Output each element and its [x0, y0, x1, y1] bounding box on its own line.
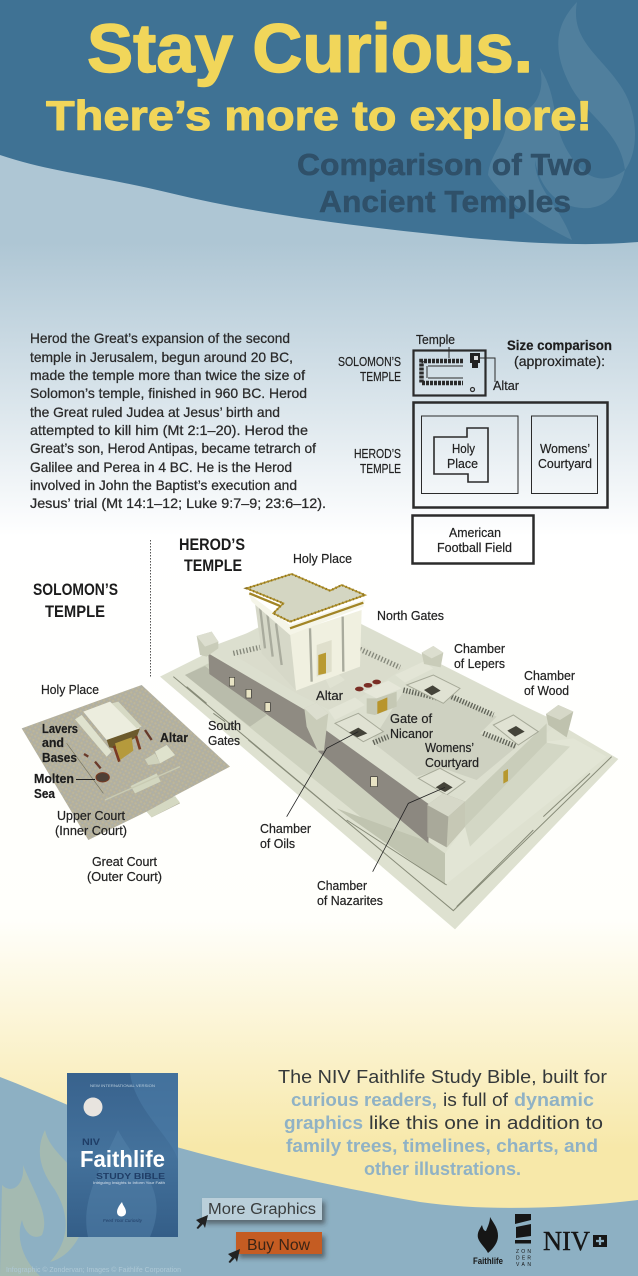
book cover: NIV Faithlife Study Bible: STUDY BIBLE — [96, 1172, 166, 1181]
text block: promotional copy: like this one in addition to — [369, 1113, 603, 1133]
labels: Solomon's temple: Great Court — [92, 855, 158, 869]
logo: NIV: NIV — [543, 1226, 590, 1256]
size comparison labels: TEMPLE — [360, 370, 401, 384]
text block: history paragraph: involved in John the Baptist’s execution and — [30, 478, 297, 493]
labels: Herod's temple: Altar — [316, 689, 343, 703]
Herod's temple plan box — [414, 402, 608, 508]
text block: promotional copy: family trees, timelines, charts, and — [286, 1136, 598, 1156]
labels: Herod's temple: of Wood — [524, 684, 569, 698]
book cover: NIV Faithlife Study Bible: Faithlife — [80, 1146, 165, 1172]
text block: promotional copy: dynamic — [514, 1090, 594, 1110]
front-left slope — [185, 663, 445, 885]
labels: Solomon's temple: (Outer Court) — [87, 870, 162, 884]
towers — [197, 632, 573, 847]
chart: size comparison diagram — [338, 333, 612, 564]
text block: promotional copy: The NIV Faithlife Study Bible, built for — [278, 1067, 607, 1087]
dark front wall face — [208, 653, 318, 751]
text block: history paragraph: Galilee and Perea in 4 BC. He is the Herod — [30, 460, 292, 475]
size comparison labels: American — [449, 526, 501, 540]
text block: history paragraph: temple in Jerusalem, begun around 20 BC, — [30, 350, 293, 365]
labels: Solomon's temple — [34, 683, 188, 884]
size comparison labels: Size comparison — [507, 338, 612, 353]
labels: Solomon's temple: Upper Court — [57, 809, 126, 823]
illustration: Herod's temple model — [160, 574, 618, 929]
labels: Solomon's temple: and — [42, 736, 64, 750]
labels: Herod's temple: Nicanor — [390, 727, 433, 741]
right front wall — [465, 723, 547, 827]
labels: Herod's temple: of Oils — [260, 837, 295, 851]
logo: Zondervan: ZON — [516, 1249, 531, 1255]
text block: history paragraph: made the temple more than twice the size of — [30, 368, 305, 383]
logo: Zondervan: VAN — [516, 1262, 531, 1268]
icon: cursor arrow for Buy Now — [228, 1249, 240, 1263]
chamber pointer lines — [287, 732, 445, 872]
labels: Herod's temple: Chamber — [524, 669, 575, 683]
temple building — [247, 574, 365, 691]
text block: history paragraph: attempted to kill him (Mt 2:1–20). Herod the — [30, 423, 308, 438]
labels: Herod's temple: North Gates — [377, 609, 444, 623]
corner chambers — [335, 675, 538, 795]
labels: Herod's temple: Chamber — [317, 879, 367, 893]
heading: Comparison of Two Ancient Temples — [297, 147, 592, 219]
gate buildings — [395, 662, 433, 683]
size comparison labels — [338, 333, 612, 555]
logo: Faithlife — [473, 1217, 503, 1266]
labels: Herod's temple: Chamber — [260, 822, 311, 836]
labels: Herod's temple: of Lepers — [454, 657, 505, 671]
labels: Herod's temple: Gate of — [390, 712, 433, 726]
temple headings: TEMPLE — [184, 556, 242, 575]
book cover: NIV Faithlife Study Bible: NIV — [82, 1137, 100, 1147]
labels: Solomon's temple: Molten — [34, 772, 74, 786]
size comparison labels: Place — [447, 457, 478, 471]
icon: cursor arrow for More Graphics — [196, 1215, 208, 1229]
text block: history paragraph: Solomon’s temple, finished in 960 BC. Herod — [30, 386, 307, 401]
text block: history paragraph: the Great ruled Judea at Jesus’ birth and — [30, 405, 280, 420]
labels: Herod's temple: South — [208, 719, 241, 733]
American football field box — [412, 516, 534, 564]
size comparison labels: Football Field — [437, 541, 512, 555]
size comparison labels: Temple — [416, 333, 455, 347]
size comparison labels: TEMPLE — [360, 462, 401, 476]
text block: history paragraph: Herod the Great’s expansion of the second — [30, 331, 290, 346]
heading: Comparison of Two Ancient Temples: Comparison of Two — [297, 147, 592, 182]
temple headings: TEMPLE — [45, 602, 105, 621]
book cover: NIV Faithlife Study Bible: NEW INTERNATIONAL VERSION — [90, 1083, 155, 1088]
size comparison labels: SOLOMON’S — [338, 355, 401, 369]
labels: Solomon's temple: (Inner Court) — [55, 824, 127, 838]
illustration: Solomon's temple model — [22, 685, 230, 840]
women's courtyard floor — [372, 692, 517, 780]
button: Buy Now — [236, 1232, 322, 1254]
text block: history paragraph: Jesus’ trial (Mt 14:1–12; Luke 9:7–9; 23:6–12). — [30, 496, 326, 511]
size comparison labels: Courtyard — [538, 457, 592, 471]
button: More Graphics: More Graphics — [208, 1201, 316, 1218]
credit line: Infographic © Zondervan; Images © Faithlife Corporation — [6, 1265, 181, 1274]
labels: Herod's temple: Womens’ — [425, 741, 474, 755]
labels: Herod's temple: Gates — [208, 734, 240, 748]
subtitle: There's more to explore: There’s more to explore! — [46, 92, 592, 139]
temple headings: HEROD’S — [179, 535, 245, 554]
labels: Solomon's temple: Lavers — [42, 722, 78, 736]
labels: Herod's temple: Chamber — [454, 642, 505, 656]
icon: footer flame watermark — [0, 1130, 86, 1276]
footer band — [0, 1077, 638, 1276]
text block: promotional copy — [278, 1067, 607, 1179]
button: Buy Now: Buy Now — [247, 1237, 311, 1254]
book cover: NIV Faithlife Study Bible: Feed Your Curiosity — [103, 1218, 143, 1223]
divider: dotted line between temples — [150, 540, 152, 678]
size comparison labels: Holy — [452, 442, 476, 456]
courtyard complex — [207, 623, 558, 817]
size comparison labels: Altar — [493, 379, 519, 393]
text block: history paragraph: Great’s son, Herod Antipas, became tetrarch of — [30, 441, 316, 456]
logo: Zondervan — [515, 1214, 531, 1268]
labels: Herod's temple — [208, 552, 575, 908]
labels: Solomon's temple: Holy Place — [41, 683, 99, 697]
temple headings — [33, 535, 245, 621]
button: More Graphics — [202, 1198, 322, 1220]
text block: promotional copy: curious readers, — [291, 1090, 437, 1110]
labels: Solomon's temple: Sea — [34, 787, 56, 801]
labels: Solomon's temple: Bases — [42, 751, 77, 765]
labels: Solomon's temple: Altar — [160, 731, 188, 745]
header band — [0, 0, 638, 244]
labels: Herod's temple: Courtyard — [425, 756, 479, 770]
front-right terrace — [445, 738, 607, 885]
logo: Faithlife: Faithlife — [473, 1256, 503, 1266]
book cover: NIV Faithlife Study Bible: Intriguing Insights to Inform Your Faith — [93, 1181, 165, 1185]
labels: Herod's temple: of Nazarites — [317, 894, 383, 908]
size comparison labels: Womens’ — [540, 442, 590, 456]
text block: history paragraph — [30, 331, 326, 511]
logo: Zondervan: DER — [516, 1256, 531, 1262]
Solomon's temple plan box — [414, 347, 495, 396]
title: Stay Curious: Stay Curious. — [87, 10, 533, 87]
base platform — [160, 627, 618, 929]
size comparison labels: (approximate): — [514, 354, 605, 369]
heading: Comparison of Two Ancient Temples: Ancient Temples — [319, 184, 571, 219]
temple headings: SOLOMON’S — [33, 580, 118, 599]
text block: promotional copy: graphics — [284, 1113, 363, 1133]
icon: header flame watermark — [488, 2, 635, 240]
text block: promotional copy: is full of — [443, 1090, 509, 1110]
north inner courtyard — [237, 643, 403, 713]
labels: Herod's temple: Holy Place — [293, 552, 352, 566]
book cover: NIV Faithlife Study Bible — [67, 1073, 178, 1237]
size comparison labels: HEROD’S — [354, 447, 401, 461]
text block: promotional copy: other illustrations. — [364, 1159, 521, 1179]
